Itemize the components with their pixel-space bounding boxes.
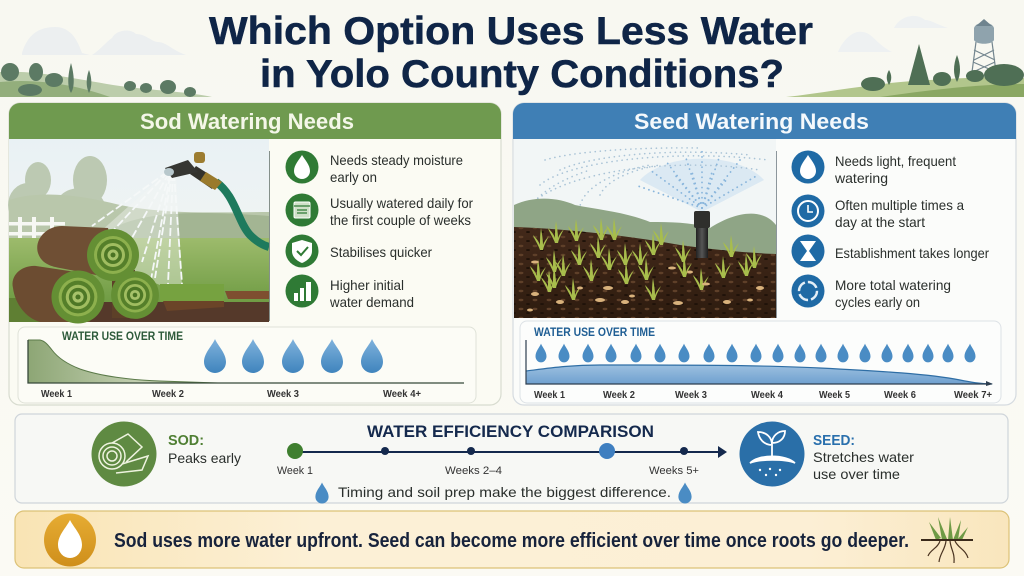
timing note [315,482,692,504]
sod rolls [13,226,269,324]
comparison heading: WATER EFFICIENCY COMPARISON [367,422,654,441]
daily watering text: the first couple of weeks [330,212,471,228]
seed water use chart: Week 2 [603,390,635,401]
seed label: SEED: [813,433,855,449]
seed water use chart: Week 4 [751,390,783,401]
icon: cycle arrows [792,274,824,308]
icon: sod roll [92,422,156,486]
seed water use chart: Week 7+ [954,390,992,401]
divider [776,151,777,318]
seed header [513,103,1016,139]
cycles text: cycles early on [835,294,920,310]
sod water use chart: Week 2 [152,389,184,400]
sod water use chart: Week 1 [41,389,72,400]
title [209,10,813,96]
seedlings [530,218,762,300]
seed label: use over time [813,466,900,482]
seed water use chart: Week 1 [534,390,565,401]
multiple times text: day at the start [835,214,925,230]
sod label [168,433,241,466]
cycles text: More total watering [835,277,951,293]
sprinkler [694,211,710,258]
daily watering text: Usually watered daily for [330,195,473,211]
seed label: Stretches water [813,449,914,465]
timeline arrow: Weeks 2–4 [445,465,502,477]
establishment text: Establishment takes longer [835,245,989,261]
frequent watering text [834,153,956,186]
water spray [100,172,182,285]
seed header: Seed Watering Needs [634,109,869,134]
multiple times text [835,197,964,230]
panel: water efficiency comparison [15,414,1008,504]
seed water use chart [520,321,1001,403]
seed photo illustration [514,139,776,318]
timeline arrow: Weeks 5+ [649,465,699,477]
icon: seedling [740,422,804,486]
sprinkler spray [640,159,764,212]
timing note: Timing and soil prep make the biggest difference. [338,484,671,500]
icon: gold water drop [44,514,96,566]
icon: water drop [286,150,318,184]
demand text: water demand [329,294,414,310]
frequent watering text: Needs light, frequent [835,153,956,169]
sod water use chart: WATER USE OVER TIME [62,331,183,343]
sod list [286,150,473,310]
landscape: left hills, trees and clouds [0,27,212,97]
seed list [792,150,989,310]
title: in Yolo County Conditions? [260,53,784,96]
sod water use chart [18,327,476,403]
seeds on soil [527,260,764,312]
timeline arrow: Week 1 [277,465,313,477]
sod photo illustration [8,139,269,324]
seed water use chart: Week 3 [675,390,707,401]
multiple times text: Often multiple times a [835,197,964,213]
panel: sod watering needs [8,103,501,405]
sod header [9,103,501,139]
landscape: right hills, water tower and trees [786,16,1024,97]
sod label: Peaks early [168,450,241,466]
hose and nozzle [164,152,269,247]
moisture text [330,152,463,185]
moisture text: early on [330,169,377,185]
seed label [813,433,914,482]
icon: hourglass [792,234,824,268]
divider [269,151,270,321]
icon: water drop [792,150,824,184]
seed water use chart: Week 5 [819,390,850,401]
demand text [329,277,414,310]
cycles text [835,277,951,310]
demand text: Higher initial [330,277,404,293]
stabilises text: Stabilises quicker [330,244,432,260]
frequent watering text: watering [834,170,888,186]
icon: clock [792,194,824,228]
panel: seed watering needs [513,103,1016,405]
seed water use chart: Week 6 [884,390,916,401]
takeaway text: Sod uses more water upfront. Seed can become more efficient over time once roots go deeper. [114,529,909,552]
icon: grass with roots [921,517,973,563]
sod water use chart: Week 4+ [383,389,421,400]
sod water use chart: Week 3 [267,389,299,400]
title: Which Option Uses Less Water [209,10,813,53]
callout: key takeaway banner [15,511,1009,568]
sod label: SOD: [168,433,204,449]
icon: shield check [286,234,318,268]
moisture text: Needs steady moisture [330,152,463,168]
sod header: Sod Watering Needs [140,109,354,134]
daily watering text [330,195,473,228]
timeline arrow [277,443,727,477]
icon: calendar [286,194,318,226]
icon: bar chart [286,274,318,308]
seed water use chart: WATER USE OVER TIME [534,327,655,339]
